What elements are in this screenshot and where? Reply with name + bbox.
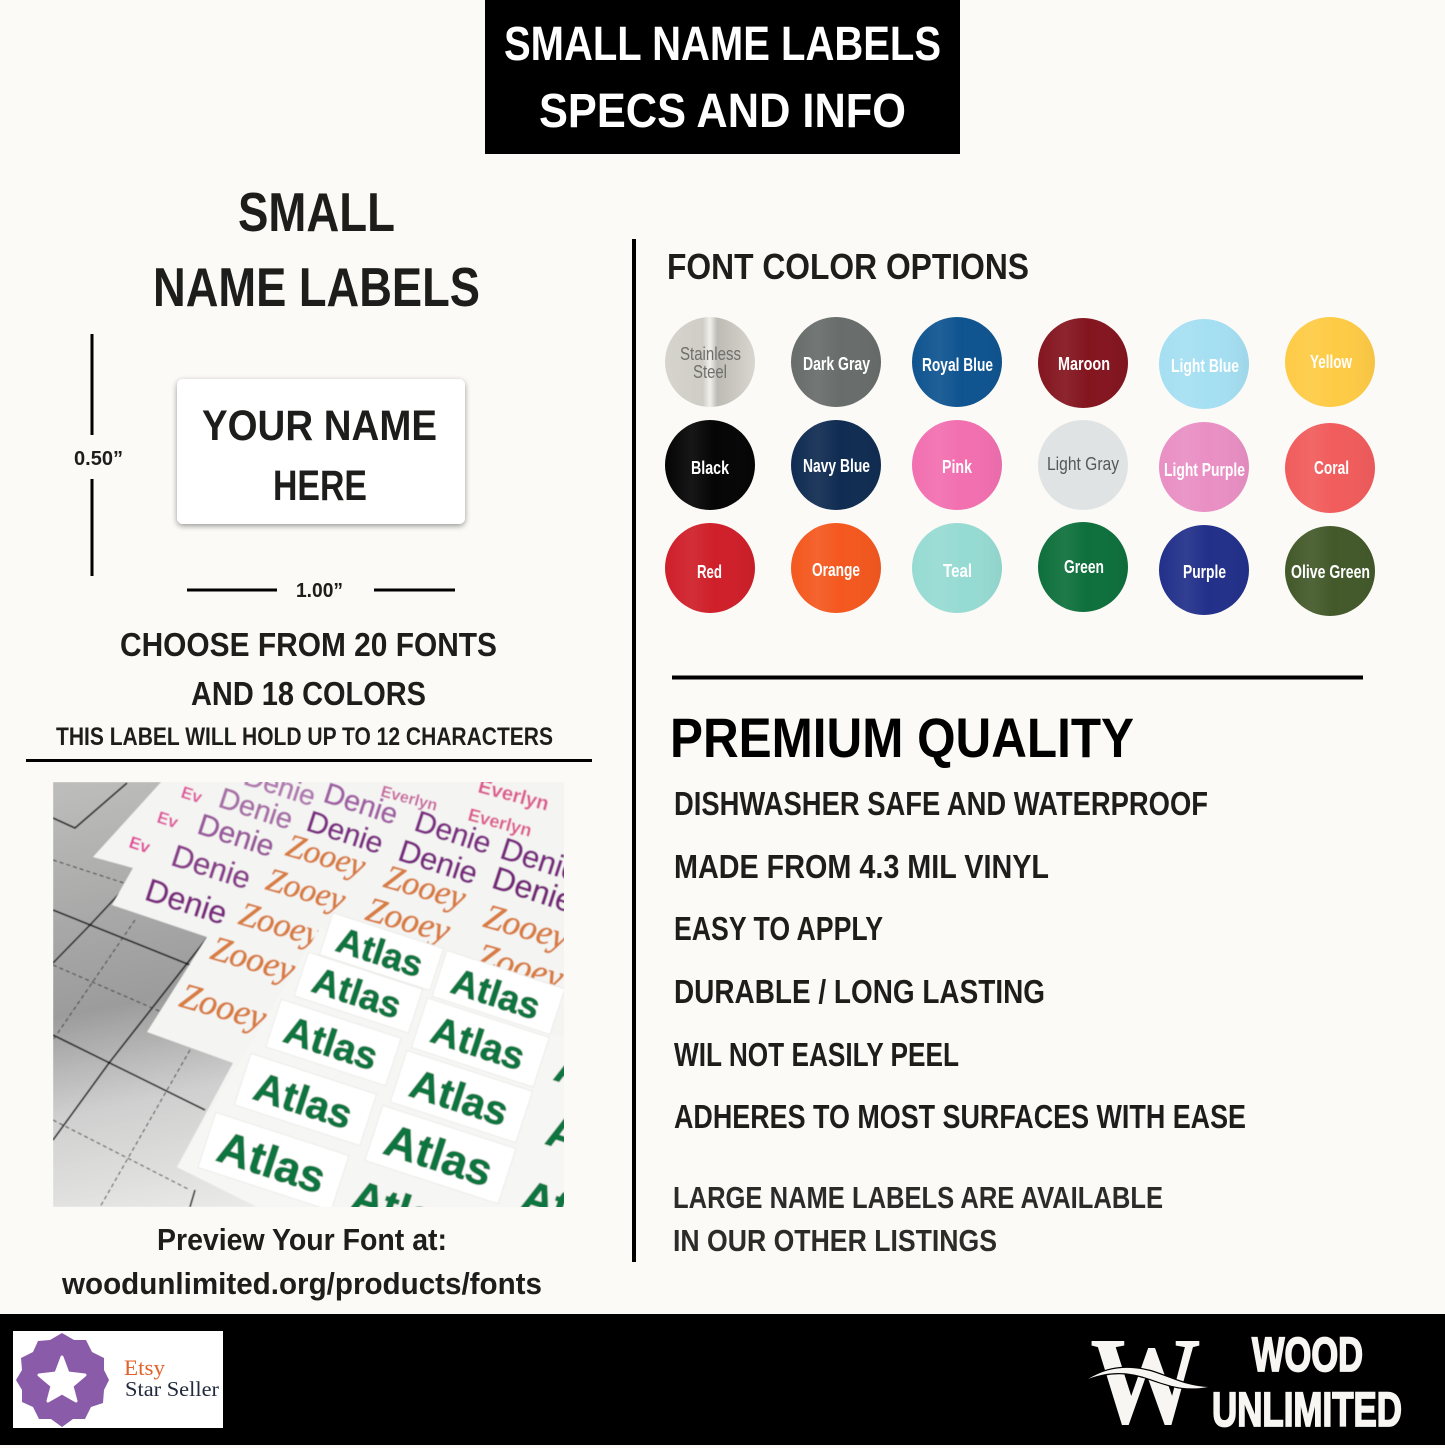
green Atlas labels: Atlas <box>426 1009 530 1079</box>
purple Denie labels: Denie <box>194 808 278 864</box>
quality feature list: ADHERES TO MOST SURFACES WITH EASE <box>674 1098 1246 1135</box>
purple Denie labels: Denie <box>320 778 402 831</box>
heading: small name labels: NAME LABELS <box>153 256 480 318</box>
swatch: Light Blue <box>1159 319 1249 409</box>
swatch: Orange <box>791 523 881 613</box>
color swatches <box>665 317 1375 616</box>
green Atlas labels: Atlas <box>446 961 545 1028</box>
quality feature list: WIL NOT EASILY PEEL <box>674 1036 959 1073</box>
pink Eve labels <box>128 786 203 853</box>
green Atlas labels: Atlas <box>550 1044 659 1119</box>
swatch: Maroon <box>1038 318 1128 408</box>
purple Denie labels: Denie <box>496 831 584 889</box>
quality feature list: DISHWASHER SAFE AND WATERPROOF <box>674 785 1208 822</box>
photo: printed name label sheets <box>53 782 564 1207</box>
large labels note: IN OUR OTHER LISTINGS <box>673 1223 997 1258</box>
swatch: Coral: Coral <box>1314 458 1349 478</box>
height dimension: 0.50 inch: 0.50” <box>74 448 123 470</box>
swatch: Light Blue: Light Blue <box>1171 356 1239 376</box>
swatch: Stainless Steel: Steel <box>693 362 727 382</box>
purple Denie labels: Denie <box>411 805 495 861</box>
green Atlas labels: Atlas <box>212 1121 332 1204</box>
label options text <box>56 626 553 751</box>
green Atlas labels: Atlas <box>379 1114 499 1197</box>
title banner <box>485 0 960 154</box>
swatch: Purple: Purple <box>1183 562 1226 582</box>
heading: font color options: FONT COLOR OPTIONS <box>667 246 1029 287</box>
Etsy star seller badge: Etsy <box>124 1355 165 1380</box>
purple Denie labels: Denie <box>488 860 579 920</box>
green Atlas labels: Atlas <box>332 919 428 985</box>
swatch: Light Purple <box>1159 422 1249 512</box>
swatch: Green <box>1038 522 1128 612</box>
purple Denie labels <box>145 782 564 924</box>
sample label: HERE <box>273 462 367 510</box>
swatch: Pink <box>912 420 1002 510</box>
width dimension: 1.00 inch: 1.00” <box>296 580 343 602</box>
Etsy star seller badge: Star Seller <box>125 1377 219 1401</box>
orange Zooey labels: Zooey <box>362 889 455 951</box>
heading: small name labels: SMALL <box>238 181 395 243</box>
sample label <box>177 379 465 524</box>
orange Zooey labels: Zooey <box>262 862 350 919</box>
green Atlas labels: Atlas <box>541 1106 658 1186</box>
swatch: Light Gray: Light Gray <box>1047 454 1119 474</box>
green Atlas labels: Atlas <box>516 1171 633 1251</box>
swatch: Stainless Steel <box>665 317 755 407</box>
Everlyn labels: Everlyn <box>379 783 439 815</box>
swatch: Olive Green <box>1285 526 1375 616</box>
orange Zooey labels: Zooey <box>380 859 471 917</box>
swatch: Stainless Steel: Stainless <box>680 344 741 364</box>
sticker sheet: front <box>310 930 322 944</box>
orange Zooey labels: Zooey <box>207 928 300 990</box>
Wood Unlimited logo: WOOD <box>1252 1329 1363 1382</box>
Wood Unlimited logo <box>1088 1313 1402 1448</box>
green Atlas labels: Atlas <box>405 1060 514 1135</box>
swatch: Green: Green <box>1064 557 1104 577</box>
orange Zooey labels: Zooey <box>480 896 573 958</box>
footer bar <box>0 1314 1445 1445</box>
font preview link text <box>61 1222 542 1301</box>
Etsy star seller badge <box>13 1331 223 1428</box>
swatch: Royal Blue <box>912 317 1002 407</box>
pink Eve labels: Ev <box>155 808 181 832</box>
sample label: YOUR NAME <box>202 402 437 450</box>
width dimension: 1.00 inch <box>187 580 455 602</box>
quality feature list: DURABLE / LONG LASTING <box>674 973 1045 1010</box>
icon: W monogram with swoosh: W <box>1090 1313 1201 1448</box>
swatch: Dark Gray <box>791 317 881 407</box>
font preview link text: woodunlimited.org/products/fonts <box>61 1266 542 1301</box>
swatch: Yellow: Yellow <box>1310 352 1353 372</box>
purple Denie labels: Denie <box>141 872 232 932</box>
swatch: Black <box>665 420 755 510</box>
swatch: Black: Black <box>691 458 730 478</box>
quality feature list: MADE FROM 4.3 MIL VINYL <box>674 848 1049 885</box>
orange Zooey labels <box>176 828 573 1038</box>
swatch: Olive Green: Olive Green <box>1291 562 1370 582</box>
purple Denie labels: Denie <box>394 833 482 891</box>
swatch: Light Purple: Light Purple <box>1164 460 1245 480</box>
label options text: AND 18 COLORS <box>191 675 426 712</box>
swatch: Teal: Teal <box>943 561 972 581</box>
heading: small name labels <box>153 181 480 318</box>
orange Zooey labels: Zooey <box>235 896 326 954</box>
swatch: Maroon: Maroon <box>1058 354 1110 374</box>
purple Denie labels: Denie <box>215 783 297 836</box>
swatch: Red: Red <box>697 562 722 582</box>
Everlyn labels <box>380 782 548 837</box>
Everlyn labels: Everlyn <box>466 805 534 841</box>
green Atlas labels: Atlas <box>346 1171 463 1251</box>
swatch: Purple <box>1159 525 1249 615</box>
heading: premium quality: PREMIUM QUALITY <box>670 706 1134 769</box>
sticker sheet: back <box>93 782 564 1156</box>
label options text: THIS LABEL WILL HOLD UP TO 12 CHARACTERS <box>56 723 553 751</box>
quality feature list: EASY TO APPLY <box>674 910 883 947</box>
font preview link text: Preview Your Font at: <box>157 1222 447 1257</box>
swatch: Dark Gray: Dark Gray <box>803 354 870 374</box>
pink Eve labels: Ev <box>179 783 205 807</box>
orange Zooey labels: Zooey <box>176 975 271 1038</box>
swatch: Yellow <box>1285 317 1375 407</box>
green Atlas labels: Atlas <box>307 960 406 1027</box>
green Atlas labels: Atlas <box>249 1063 358 1138</box>
swatch: Navy Blue <box>791 420 881 510</box>
title banner: SMALL NAME LABELS <box>504 18 941 71</box>
green Atlas labels: Atlas <box>279 1009 383 1079</box>
swatch: Pink: Pink <box>942 457 973 477</box>
pink Eve labels: Ev <box>127 833 153 857</box>
quality feature list <box>674 785 1246 1135</box>
icon: purple star seal <box>16 1333 109 1427</box>
swatch: Teal <box>912 523 1002 613</box>
swatch: Orange: Orange <box>812 560 860 580</box>
swatch: Light Gray <box>1038 420 1128 510</box>
green Atlas labels <box>200 914 564 1207</box>
swatch: Royal Blue: Royal Blue <box>922 355 993 375</box>
orange Zooey labels: Zooey <box>473 935 568 998</box>
swatch: Navy Blue: Navy Blue <box>803 456 870 476</box>
purple Denie labels: Denie <box>240 760 320 812</box>
Everlyn labels: Everlyn <box>476 776 551 816</box>
large labels note <box>673 1180 1163 1258</box>
orange Zooey labels: Zooey <box>282 828 370 885</box>
label options text: CHOOSE FROM 20 FONTS <box>120 626 497 663</box>
swatch: Red <box>665 523 755 613</box>
swatch: Coral <box>1285 423 1375 513</box>
title banner: SPECS AND INFO <box>539 85 906 138</box>
purple Denie labels: Denie <box>167 838 255 896</box>
large labels note: LARGE NAME LABELS ARE AVAILABLE <box>673 1180 1163 1215</box>
height dimension: 0.50 inch <box>74 334 123 576</box>
purple Denie labels: Denie <box>303 805 387 861</box>
